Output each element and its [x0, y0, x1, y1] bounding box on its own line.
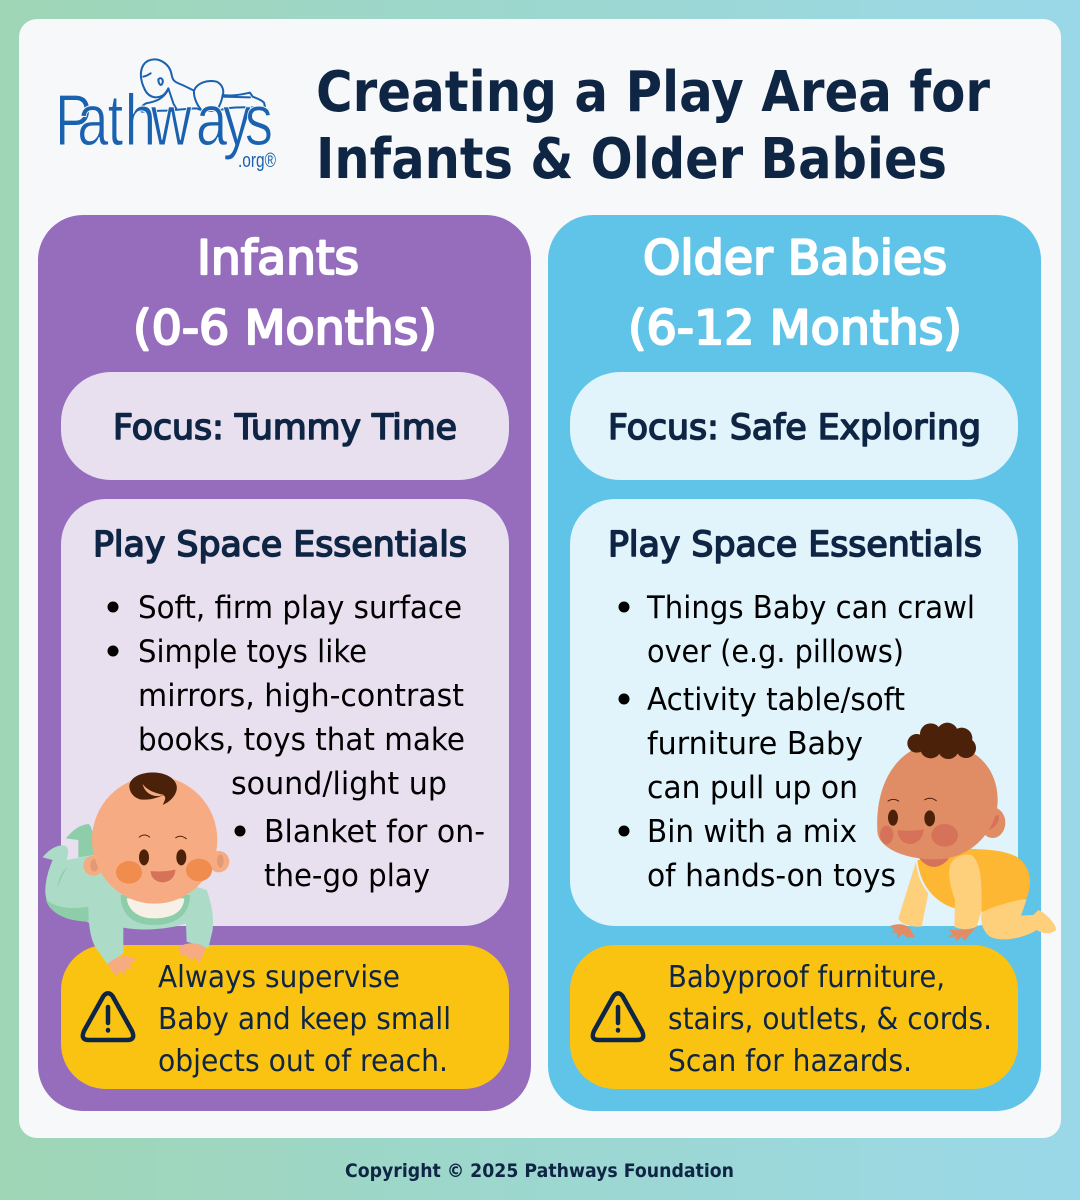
- essentials box: infants: Soft, firm play surface: [138, 590, 462, 626]
- warning callout: infants: [61, 945, 509, 1089]
- panel: older babies: [548, 215, 1041, 1111]
- heading: older babies: Older Babies: [643, 231, 947, 286]
- warning callout: older babies: Scan for hazards.: [668, 1044, 912, 1079]
- warning callout: older babies: stairs, outlets, & cords.: [668, 1002, 992, 1037]
- warning callout: infants: objects out of reach.: [158, 1044, 448, 1079]
- icon: baby outline: [141, 60, 265, 112]
- icon: warning triangle: [83, 993, 133, 1040]
- essentials box: infants: books, toys that make: [138, 722, 465, 758]
- illustration: crawling infant in green: [43, 772, 229, 977]
- logo: Pathways.org: [55, 60, 276, 172]
- title: [316, 60, 990, 192]
- essentials box: infants: [61, 499, 509, 926]
- title: Infants & Older Babies: [316, 127, 947, 192]
- copyright footer: Copyright © 2025 Pathways Foundation: [345, 1160, 734, 1182]
- essentials box: infants: Play Space Essentials: [93, 525, 467, 565]
- warning callout: older babies: [570, 945, 1018, 1089]
- focus pill: tummy time: Focus: Tummy Time: [113, 408, 457, 448]
- warning callout: older babies: Babyproof furniture,: [668, 960, 945, 995]
- essentials box: older babies: Things Baby can crawl: [646, 590, 975, 626]
- illustration: crawling older baby in yellow: [877, 723, 1056, 941]
- essentials box: infants: sound/light up: [231, 766, 447, 802]
- essentials box: older babies: furniture Baby: [647, 726, 863, 762]
- essentials box: infants: mirrors, high-contrast: [138, 678, 464, 714]
- logo wordmark: Pathways: [55, 80, 273, 161]
- focus pill: tummy time: [61, 372, 509, 480]
- essentials box: older babies: [570, 499, 1018, 926]
- heading: infants: Infants: [197, 231, 359, 286]
- panel: infants: [38, 215, 531, 1111]
- essentials box: older babies: Bin with a mix: [647, 814, 857, 850]
- essentials box: infants: the-go play: [264, 858, 430, 894]
- icon: warning triangle: [593, 993, 643, 1040]
- warning callout: infants: Baby and keep small: [158, 1002, 451, 1037]
- heading: infants: (0-6 Months): [133, 301, 437, 356]
- essentials box: older babies: over (e.g. pillows): [647, 634, 904, 670]
- essentials box: infants: Blanket for on-: [264, 814, 485, 850]
- focus pill: safe exploring: [570, 372, 1018, 480]
- logo suffix: .org®: [238, 150, 276, 172]
- essentials box: infants: Simple toys like: [138, 634, 367, 670]
- essentials box: older babies: Activity table/soft: [647, 682, 905, 718]
- title: Creating a Play Area for: [316, 60, 990, 125]
- heading: infants: [133, 231, 437, 356]
- essentials box: older babies: can pull up on: [647, 770, 858, 806]
- focus pill: safe exploring: Focus: Safe Exploring: [608, 408, 981, 448]
- heading: older babies: [628, 231, 962, 356]
- warning callout: infants: Always supervise: [158, 960, 400, 995]
- heading: older babies: (6-12 Months): [628, 301, 962, 356]
- essentials box: older babies: Play Space Essentials: [608, 525, 982, 565]
- essentials box: older babies: of hands-on toys: [647, 858, 896, 894]
